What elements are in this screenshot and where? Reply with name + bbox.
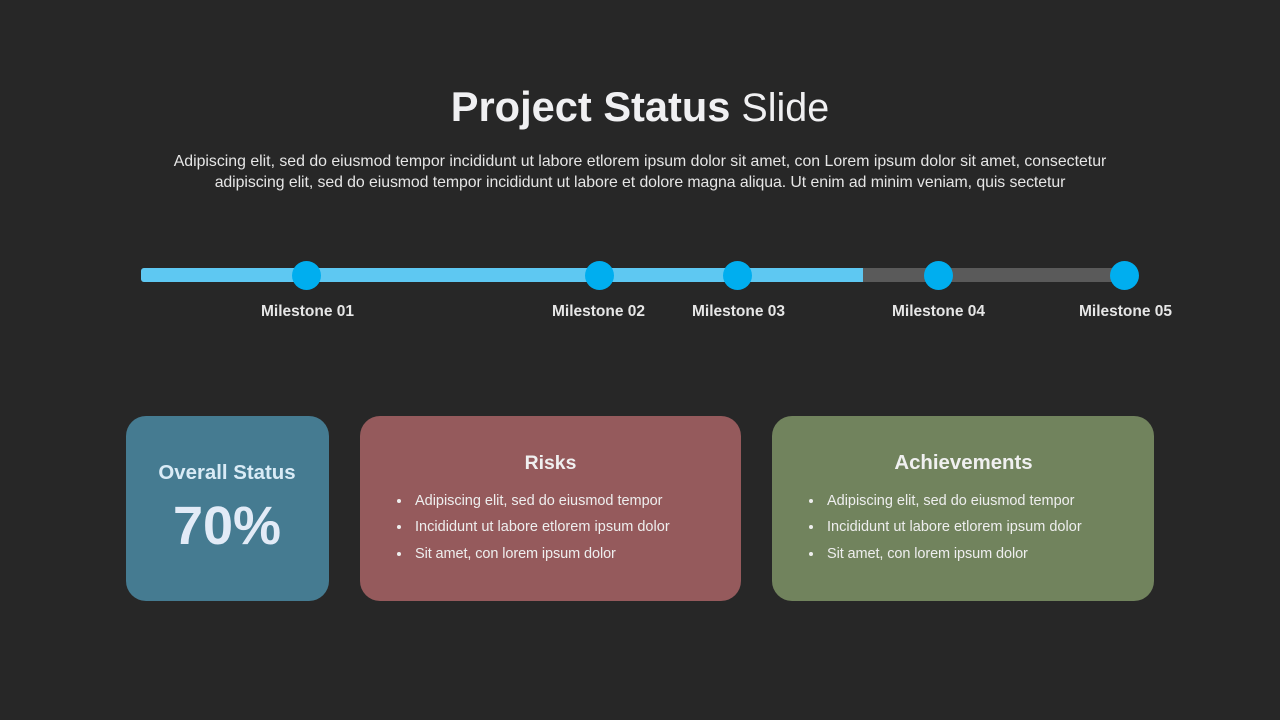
timeline track: [141, 268, 1125, 282]
milestone 3 label: Milestone 03: [692, 303, 785, 320]
panel: achievements: [772, 416, 1154, 601]
risk item 1: Adipiscing elit, sed do eiusmod tempor: [415, 493, 662, 509]
timeline: [141, 261, 1172, 320]
timeline progress: [141, 268, 863, 282]
achievements heading: Achievements: [894, 452, 1033, 474]
overall status value: 70%: [173, 496, 281, 556]
risk item 2: Incididunt ut labore etlorem ipsum dolor: [415, 519, 670, 535]
milestone 5 dot: [1110, 261, 1139, 290]
milestone 1 label: Milestone 01: [261, 303, 354, 320]
milestone 5 label: Milestone 05: [1079, 303, 1172, 320]
achievement item 3: Sit amet, con lorem ipsum dolor: [827, 546, 1028, 562]
intro text: adipiscing elit, sed do eiusmod tempor incididunt ut labore et dolore magna aliqua. Ut enim ad minim veniam, quis sectetur: [215, 174, 1065, 190]
milestone 2 label: Milestone 02: [552, 303, 645, 320]
risk item 3: Sit amet, con lorem ipsum dolor: [415, 546, 616, 562]
title: Project Status Slide: [451, 83, 829, 130]
achievement item 1: Adipiscing elit, sed do eiusmod tempor: [827, 493, 1074, 509]
panel: risks: [360, 416, 741, 601]
intro text: Adipiscing elit, sed do eiusmod tempor incididunt ut labore etlorem ipsum dolor sit amet, con Lorem ipsum dolor sit amet, consectetur: [174, 153, 1106, 170]
intro text: [174, 153, 1106, 190]
risks list: [397, 493, 670, 562]
risks heading: Risks: [525, 452, 576, 474]
panel: overall status: [126, 416, 329, 601]
milestone 2 dot: [585, 261, 614, 290]
achievement item 2: Incididunt ut labore etlorem ipsum dolor: [827, 519, 1082, 535]
milestone 3 dot: [723, 261, 752, 290]
milestone 4 dot: [924, 261, 953, 290]
milestone 4 label: Milestone 04: [892, 303, 985, 320]
milestone 1 dot: [292, 261, 321, 290]
overall status heading: Overall Status: [158, 462, 296, 484]
achievements list: [809, 493, 1082, 562]
